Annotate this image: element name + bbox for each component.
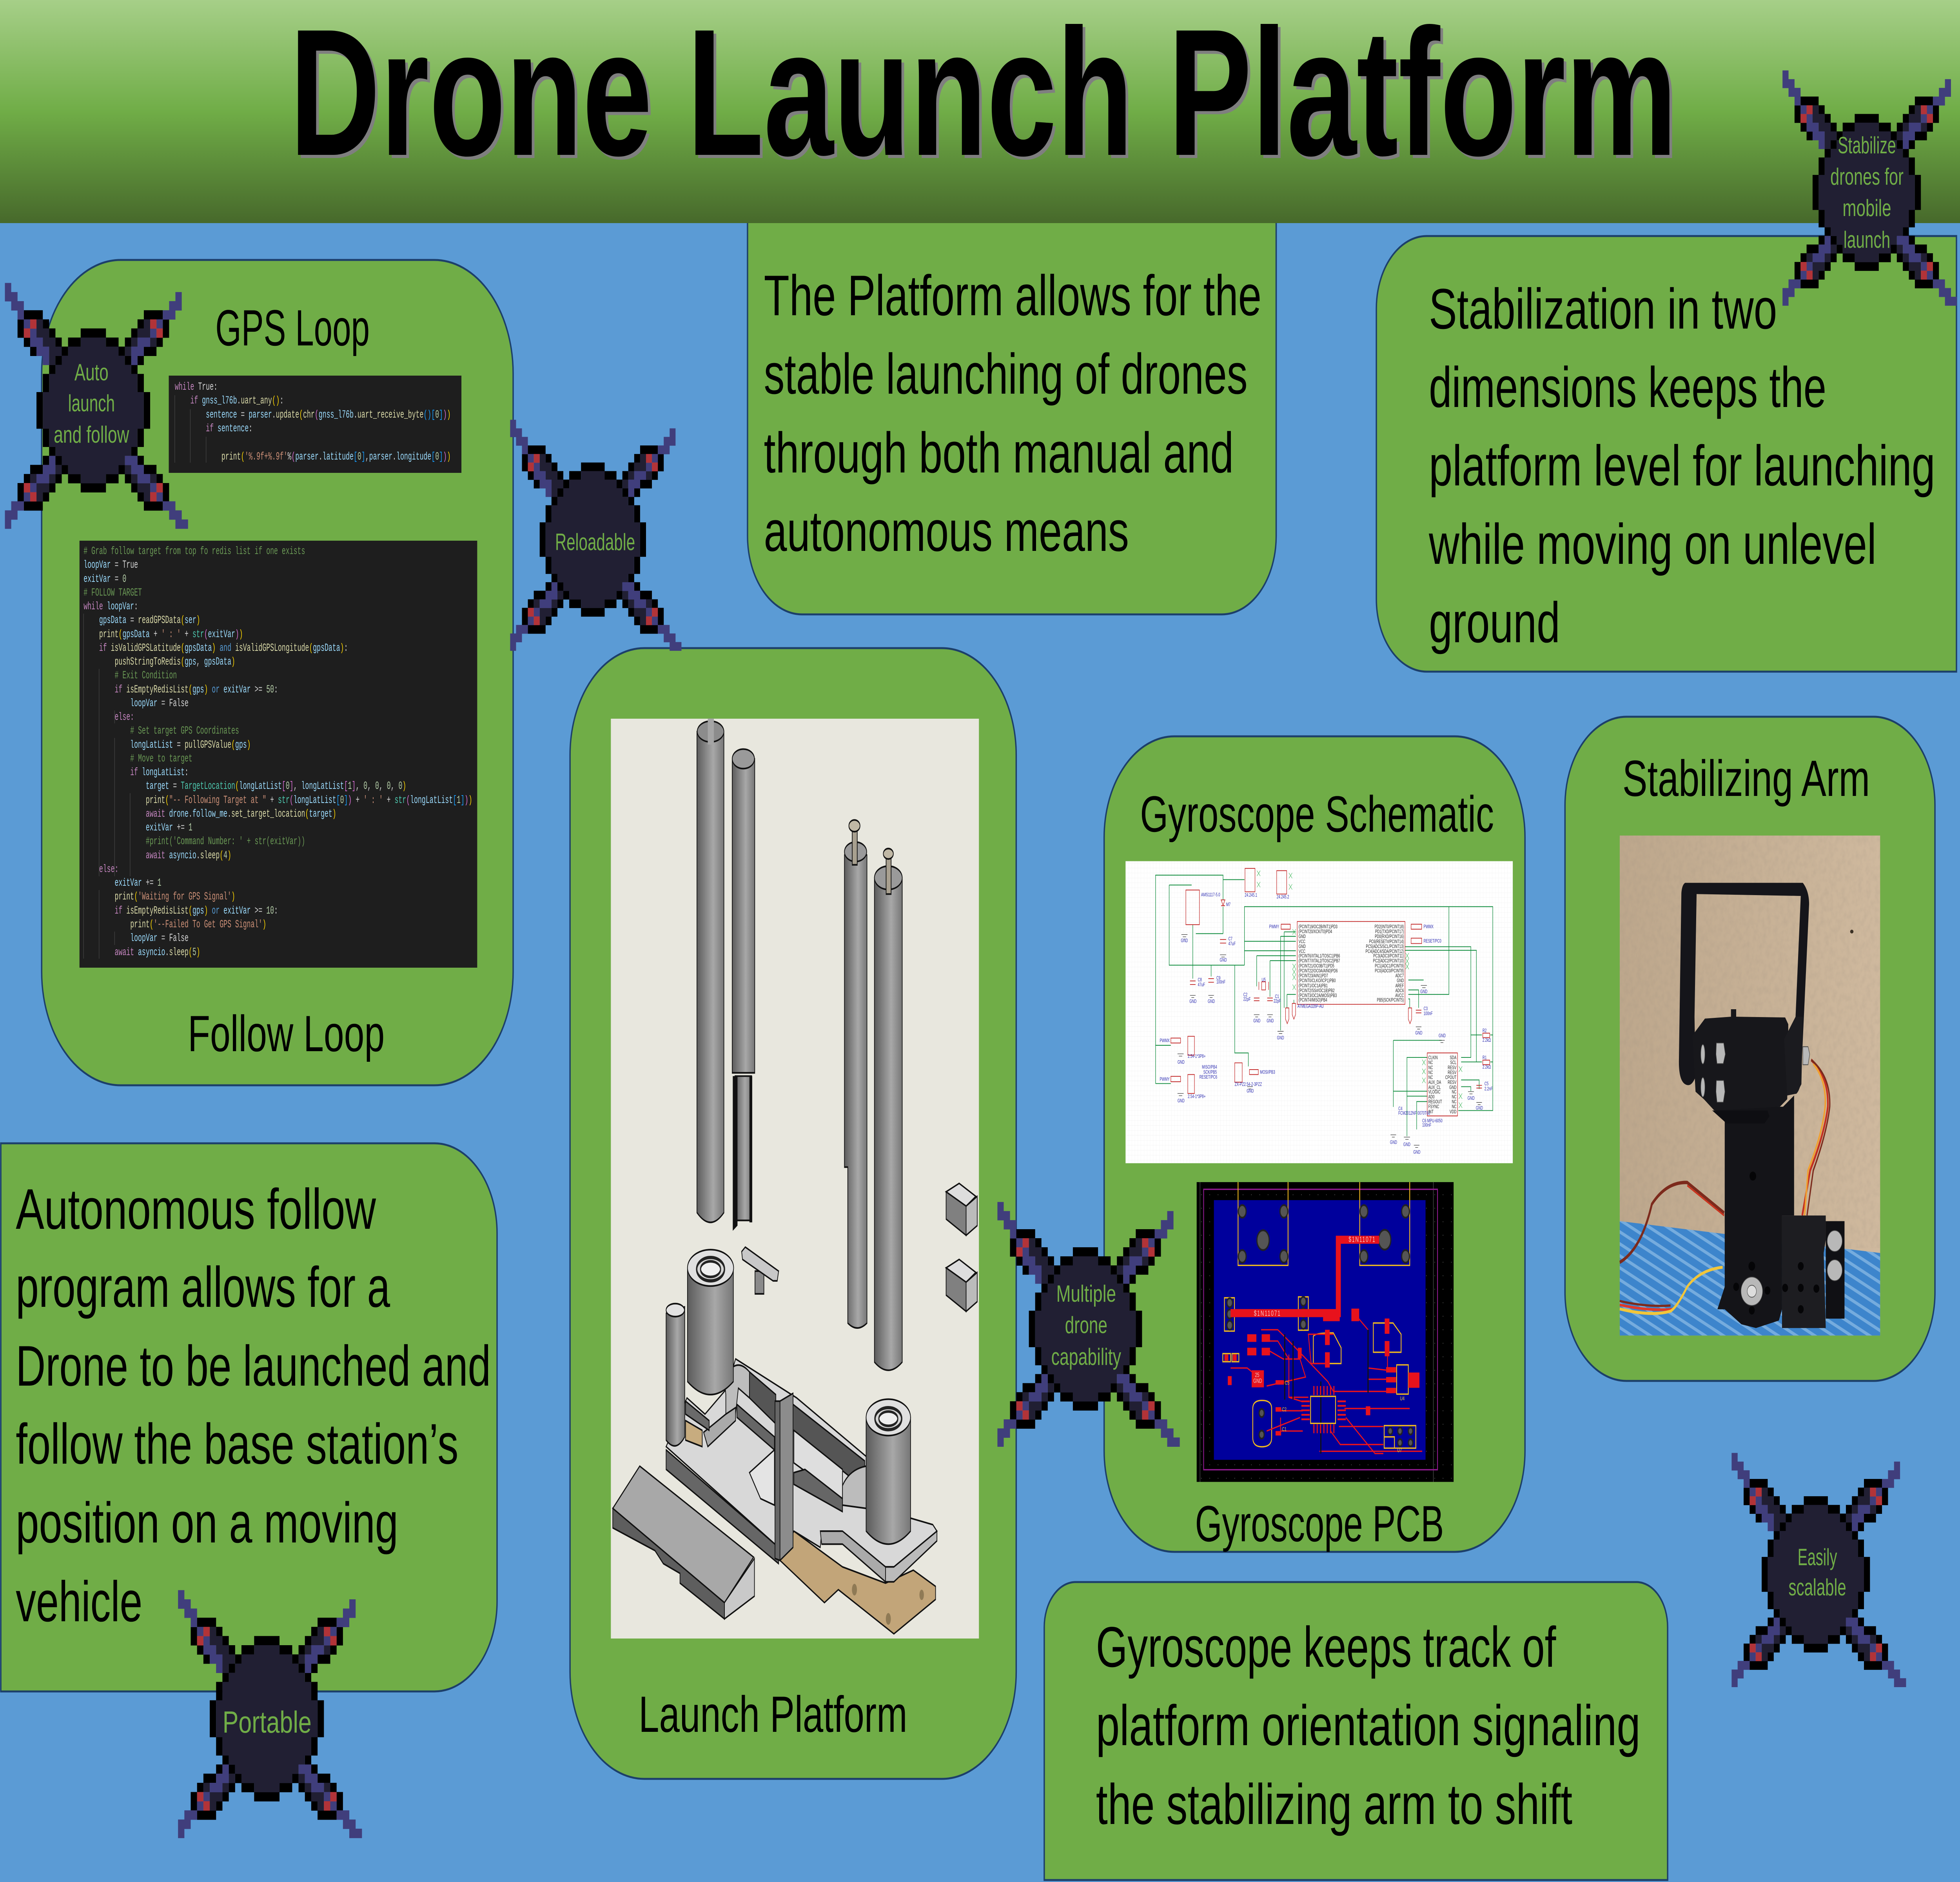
image: gyroscope circuit schematic: C1: [1275, 994, 1279, 999]
code block: follow loop: exitVar = 0: [83, 573, 126, 585]
drone badge: auto launch and follow: [5, 288, 188, 524]
image: gyroscope PCB layout: C1: [1282, 1426, 1287, 1432]
image: gyroscope circuit schematic: (PCINT0/CLKO/ICP1)PB0: [1299, 978, 1336, 984]
image: gyroscope circuit schematic: 24.245.2: [1277, 894, 1289, 900]
panel: gyroscope description: [1044, 1582, 1668, 1880]
image: gyroscope circuit schematic: 47uF: [1229, 941, 1236, 947]
drone badge: stabilize drones for mobile launch: mobile: [1842, 194, 1891, 221]
image: gyroscope circuit schematic: AUX_CL: [1428, 1085, 1441, 1090]
drone badge: multiple drone capability: [997, 1207, 1180, 1442]
image: gyroscope circuit schematic: ATMEGA328P-AU: [1298, 1004, 1324, 1009]
image: gyroscope PCB layout: [1197, 1182, 1454, 1482]
image: gyroscope circuit schematic: VCC: [1299, 949, 1305, 954]
image: gyroscope circuit schematic: GND: [1267, 1018, 1274, 1024]
image: gyroscope circuit schematic: NC: [1452, 1089, 1456, 1095]
image: gyroscope circuit schematic: C4: [1398, 1106, 1403, 1112]
panel: platform summary: The Platform allows for the: [764, 263, 1261, 327]
image: gyroscope circuit schematic: FSYNC: [1428, 1104, 1439, 1110]
image: gyroscope circuit schematic: MOSI/PB3: [1260, 1069, 1275, 1075]
image: gyroscope circuit schematic: 2.2kΩ: [1483, 1065, 1491, 1070]
image: gyroscope PCB layout: GND: [1253, 1377, 1262, 1384]
title banner: [0, 0, 1960, 223]
image: gyroscope circuit schematic: (PCINT2/SS#/OC1B)PB2: [1299, 988, 1335, 994]
image: gyroscope circuit schematic: NC: [1428, 1070, 1433, 1075]
image: gyroscope circuit schematic: AREF: [1396, 983, 1404, 988]
drone badge: multiple drone capability: Multiple: [1056, 1280, 1116, 1307]
image: gyroscope PCB layout: U4: [1400, 1395, 1405, 1402]
code block: follow loop: # Move to target: [130, 752, 192, 765]
panel: autonomous follow description: vehicle: [16, 1570, 142, 1633]
image: gyroscope circuit schematic: (PCINT19/OC2B/INT1)PD3: [1299, 924, 1338, 930]
image: gyroscope circuit schematic: REGOUT: [1428, 1099, 1442, 1105]
image: gyroscope circuit schematic: AUX_DA: [1428, 1080, 1441, 1085]
image: gyroscope circuit schematic: PC1(ADC1/PCINT9): [1375, 963, 1404, 969]
image: gyroscope circuit schematic: [1125, 861, 1513, 1163]
image: gyroscope circuit schematic: C3: [1424, 1006, 1428, 1012]
image: gyroscope PCB layout: 25: [1255, 1372, 1259, 1379]
panel: platform summary: autonomous means: [764, 499, 1129, 563]
panel: platform summary: stable launching of drones: [764, 342, 1248, 406]
panel: launch platform: [570, 648, 1016, 1779]
drone badge: auto launch and follow: Auto: [74, 359, 109, 385]
image: gyroscope circuit schematic: GND: [1253, 1018, 1260, 1024]
drone badge: stabilize drones for mobile launch: launch: [1844, 226, 1890, 253]
image: gyroscope circuit schematic: 22pF: [1243, 996, 1251, 1002]
image: gyroscope circuit schematic: AMS1117-5.0: [1201, 892, 1220, 898]
code block: follow loop: # Exit Condition: [115, 669, 177, 682]
image: gyroscope circuit schematic: (PCINT21/OC0B/T1)PD5: [1299, 963, 1334, 969]
drone badge: reloadable: [510, 424, 681, 647]
panel: autonomous follow description: Autonomous follow: [16, 1177, 376, 1241]
image: gyroscope circuit schematic: C2: [1243, 992, 1247, 997]
image: gyroscope circuit schematic: RESV: [1448, 1080, 1457, 1085]
image: gyroscope PCB layout: C2: [1282, 1406, 1287, 1413]
code block: follow loop: exitVar += 1: [146, 821, 192, 834]
image: gyroscope circuit schematic: C6 MPU-6050: [1422, 1118, 1443, 1124]
heading: GPS Loop: GPS Loop: [215, 300, 370, 356]
panel: stabilization description: platform level for launching: [1429, 434, 1935, 498]
code block: follow loop: # Set target GPS Coordinates: [130, 725, 239, 737]
image: gyroscope circuit schematic: R1: [1483, 1055, 1486, 1061]
code block: follow loop: loopVar = True: [83, 559, 138, 571]
image: gyroscope circuit schematic: (PCINT4/MISO)PB4: [1299, 997, 1327, 1003]
image: gyroscope circuit schematic: PWMX: [1424, 924, 1434, 930]
image: gyroscope PCB layout: C5: [1285, 1379, 1289, 1386]
drone badge: stabilize drones for mobile launch: Stabilize: [1838, 132, 1896, 158]
image: gyroscope PCB layout: U7: [1397, 1447, 1402, 1453]
panel: autonomous follow description: follow the base station’s: [16, 1412, 458, 1476]
panel: gyroscope description: Gyroscope keeps track of: [1096, 1615, 1556, 1679]
image: gyroscope circuit schematic: GND: [1476, 1105, 1483, 1111]
code block: GPS loop: while True:: [175, 381, 218, 393]
image: photo of stabilizing arm: [1620, 836, 1880, 1335]
image: gyroscope circuit schematic: 100nF: [1424, 1011, 1433, 1017]
image: gyroscope circuit schematic: PWMY: [1160, 1077, 1170, 1082]
panel: stabilization description: dimensions keeps the: [1429, 355, 1826, 419]
drone badge: easily scalable: scalable: [1788, 1574, 1846, 1600]
drone badge: stabilize drones for mobile launch: [1782, 75, 1957, 301]
image: gyroscope circuit schematic: GND: [1449, 1085, 1456, 1090]
image: gyroscope circuit schematic: GND: [1439, 1033, 1446, 1039]
drone badge: portable: [178, 1595, 362, 1833]
image: gyroscope circuit schematic: PD2(INT0/PCINT18): [1375, 924, 1404, 930]
image: gyroscope circuit schematic: 100nF: [1422, 1123, 1431, 1128]
image: gyroscope circuit schematic: (PCINT22/OC0A/AIN0)PD6: [1299, 968, 1338, 974]
drone badge: easily scalable: [1731, 1457, 1906, 1683]
image: gyroscope circuit schematic: R2: [1483, 1028, 1486, 1034]
image: gyroscope circuit schematic: GND: [1277, 1035, 1284, 1041]
code block: follow loop: if isValidGPSLatitude(gpsData) and isValidGPSLongitude(gpsData):: [99, 642, 348, 654]
panel: platform summary: through both manual and: [764, 421, 1234, 485]
image: gyroscope circuit schematic: C9: [1216, 976, 1220, 981]
code block: follow loop: await asyncio.sleep(4): [146, 849, 231, 862]
heading: Follow Loop: Follow Loop: [188, 1005, 385, 1062]
code block: GPS loop: sentence = parser.update(chr(gnss_l76b.uart_receive_byte()[0])): [206, 409, 451, 421]
drone badge: portable: Portable: [223, 1705, 312, 1739]
drone badge: reloadable: Reloadable: [555, 529, 635, 555]
code block: follow loop: # FOLLOW TARGET: [83, 587, 142, 599]
image: gyroscope circuit schematic: GND: [1415, 1030, 1423, 1036]
image: gyroscope circuit schematic: ADC7: [1396, 973, 1404, 979]
image: gyroscope circuit schematic: (PCINT7/XTAL2/TOSC2)PB7: [1299, 958, 1340, 964]
image: gyroscope circuit schematic: GND: [1390, 1140, 1397, 1145]
image: gyroscope circuit schematic: 2.54-1*3P8+: [1188, 1054, 1206, 1059]
panel: stabilization description: ground: [1429, 590, 1560, 654]
image: gyroscope circuit schematic: VLOGIC: [1428, 1089, 1441, 1095]
image: gyroscope circuit schematic: GND: [1299, 944, 1306, 950]
panel: gyroscope description: platform orientation signaling: [1096, 1693, 1641, 1757]
image: gyroscope circuit schematic: MISO/PB4: [1202, 1065, 1217, 1070]
code block: follow loop: print('Waiting for GPS Signal'): [115, 890, 235, 903]
panel: stabilization description: Stabilization in two: [1429, 277, 1777, 341]
heading: Gyroscope PCB: Gyroscope PCB: [1195, 1495, 1444, 1552]
image: gyroscope circuit schematic: 47uF: [1198, 982, 1205, 988]
code block: follow loop: else:: [99, 863, 118, 876]
image: gyroscope circuit schematic: 24.245.1: [1245, 892, 1257, 898]
image: gyroscope circuit schematic: PC2(ADC2/PCINT10): [1373, 958, 1404, 964]
image: gyroscope circuit schematic: GND: [1189, 999, 1196, 1005]
image: gyroscope circuit schematic: FCM2012NF 0070T68: [1398, 1110, 1430, 1116]
image: gyroscope circuit schematic: PB5(SCK/PCINT5): [1377, 997, 1404, 1003]
image: gyroscope PCB layout: $1N11071: [1254, 1309, 1280, 1318]
image: gyroscope circuit schematic: PC3(ADC3/PCINT11): [1373, 953, 1404, 959]
drone badge: auto launch and follow: and follow: [54, 421, 129, 448]
panel: stabilizing arm: [1565, 717, 1935, 1381]
image: gyroscope circuit schematic: NC: [1428, 1065, 1433, 1070]
panel: gyroscope schematic and PCB: [1104, 736, 1525, 1552]
image: gyroscope circuit schematic: (PCINT3/OC2A/MOSI)PB3: [1299, 993, 1337, 999]
code block: follow loop: if isEmptyRedisList(gps) or exitVar >= 50:: [115, 683, 278, 696]
panel: gyroscope description: the stabilizing arm to shift: [1096, 1772, 1572, 1836]
drone badge: auto launch and follow: launch: [68, 390, 115, 416]
image: gyroscope circuit schematic: GND: [1208, 999, 1215, 1005]
image: gyroscope PCB layout: $1N11071: [1348, 1235, 1375, 1244]
image: gyroscope circuit schematic: NC: [1452, 1099, 1456, 1105]
image: gyroscope circuit schematic: NC: [1452, 1104, 1456, 1110]
image: gyroscope circuit schematic: 2.2nF: [1485, 1086, 1493, 1092]
image: gyroscope circuit schematic: VDD: [1450, 1109, 1456, 1115]
image: gyroscope circuit schematic: GND: [1299, 934, 1306, 939]
image: gyroscope circuit schematic: 22pF: [1274, 998, 1281, 1004]
image: gyroscope circuit schematic: NC: [1428, 1060, 1433, 1066]
code block: follow loop: loopVar = False: [130, 697, 189, 710]
image: gyroscope circuit schematic: PWMX: [1160, 1038, 1170, 1044]
code block: follow loop: loopVar = False: [130, 932, 189, 945]
code block: follow loop: # Grab follow target from top fo redis list if one exists: [83, 545, 305, 558]
heading: Launch Platform: Launch Platform: [639, 1686, 907, 1743]
code block: GPS loop: if gnss_l76b.uart_any():: [190, 394, 283, 407]
image: gyroscope circuit schematic: ADC6: [1396, 988, 1404, 994]
image: gyroscope circuit schematic: GND: [1397, 978, 1404, 984]
image: gyroscope circuit schematic: PWMY: [1269, 924, 1279, 930]
image: gyroscope circuit schematic: GND: [1247, 1088, 1254, 1094]
image: gyroscope circuit schematic: SCK/PB5: [1203, 1069, 1217, 1075]
image: gyroscope circuit schematic: CPOUT: [1445, 1075, 1456, 1081]
image: gyroscope circuit schematic: C7: [1229, 936, 1232, 942]
image: gyroscope circuit schematic: NC: [1428, 1075, 1433, 1081]
image: gyroscope circuit schematic: RESV: [1448, 1065, 1457, 1070]
image: gyroscope circuit schematic: (PCINT1/OC1A)PB1: [1299, 983, 1328, 988]
image: gyroscope circuit schematic: AVCC: [1395, 993, 1404, 999]
image: gyroscope circuit schematic: GND: [1468, 1095, 1475, 1101]
panel: stabilization description: while moving on unlevel: [1428, 512, 1877, 576]
code block: follow loop: await drone.follow_me.set_target_location(target): [146, 808, 336, 820]
image: gyroscope circuit schematic: RESET/PC6: [1200, 1074, 1217, 1080]
drone badge: multiple drone capability: drone: [1065, 1312, 1107, 1338]
image: gyroscope circuit schematic: GND: [1420, 989, 1427, 994]
code block: follow loop: if isEmptyRedisList(gps) or exitVar >= 10:: [115, 905, 278, 917]
image: gyroscope circuit schematic: (PCINT6/XTAL1/TOSC1)PB6: [1299, 953, 1340, 959]
image: gyroscope circuit schematic: GND: [1178, 1059, 1185, 1065]
image: gyroscope circuit schematic: C5: [1485, 1081, 1488, 1087]
image: gyroscope circuit schematic: 2.54-1*3P8+: [1188, 1094, 1206, 1099]
image: gyroscope circuit schematic: RESV: [1448, 1070, 1457, 1075]
image: gyroscope circuit schematic: (PCINT20/XCK/T0)PD4: [1299, 929, 1332, 935]
image: gyroscope circuit schematic: GND: [1220, 957, 1227, 963]
image: gyroscope circuit schematic: SCL: [1450, 1060, 1456, 1066]
image: gyroscope circuit schematic: PC5(ADC5/SCL/PCINT13): [1366, 944, 1404, 950]
image: gyroscope circuit schematic: CLKIN: [1428, 1055, 1438, 1061]
code block: follow loop: gpsData = readGPSData(ser): [99, 614, 200, 627]
code block: follow loop: pushStringToRedis(gps, gpsData): [115, 656, 235, 668]
code block: GPS loop: if sentence:: [206, 422, 252, 435]
image: gyroscope circuit schematic: PD1(TXD/PCINT17): [1375, 929, 1404, 935]
code block: follow loop: print('--Failed To Get GPS Signal'): [130, 918, 266, 931]
panel: autonomous follow description: position on a moving: [16, 1491, 398, 1555]
drone badge: stabilize drones for mobile launch: drones for: [1830, 163, 1904, 190]
image: gyroscope circuit schematic: INT: [1428, 1109, 1434, 1115]
panel: autonomous follow description: [1, 1143, 497, 1691]
panel: autonomous follow description: program allows for a: [16, 1255, 390, 1319]
image: gyroscope circuit schematic: C8: [1198, 977, 1202, 983]
code block: follow loop: print(gpsData + ' : ' + str(exitVar)): [99, 628, 243, 641]
image: gyroscope circuit schematic: (PCINT23/AIN1)PD7: [1299, 973, 1328, 979]
panel: autonomous follow description: Drone to be launched and: [16, 1334, 491, 1398]
panel: GPS loop and follow loop: [42, 260, 513, 1085]
heading: Gyroscope Schematic: Gyroscope Schematic: [1140, 786, 1494, 843]
image: gyroscope circuit schematic: AD0: [1428, 1094, 1435, 1100]
code block: follow loop: #print('Command Number: ' + str(exitVar)): [146, 835, 305, 848]
code block: follow loop: await asyncio.sleep(5): [115, 946, 200, 959]
code block: follow loop: target = TargetLocation(longLatList[0], longLatList[1], 0, 0, 0, 0): [146, 780, 406, 792]
image: gyroscope circuit schematic: U5: [1262, 977, 1266, 983]
code block: follow loop: exitVar += 1: [115, 877, 162, 889]
drone badge: multiple drone capability: capability: [1051, 1343, 1121, 1370]
heading: Stabilizing Arm: Stabilizing Arm: [1622, 750, 1870, 807]
image: gyroscope circuit schematic: 2.2kΩ: [1483, 1037, 1491, 1043]
image: gyroscope circuit schematic: RESET/PC0: [1424, 938, 1441, 944]
image: gyroscope circuit schematic: PD0(RXD/PCINT16): [1375, 934, 1404, 939]
code block: follow loop: else:: [115, 711, 134, 723]
image: gyroscope circuit schematic: NC: [1452, 1094, 1456, 1100]
code block: follow loop: while loopVar:: [83, 600, 138, 613]
code block: GPS loop: print('%.9f+%.9f'%(parser.latitude[0],parser.longitude[0])): [221, 451, 451, 463]
image: gyroscope circuit schematic: M7: [1226, 902, 1230, 908]
image: gyroscope circuit schematic: GND: [1178, 1098, 1185, 1104]
code block: follow loop: print("-- Following Target at " + str(longLatList[0]) + ' : ' + str(longLatList[1])): [146, 794, 472, 807]
image: gyroscope circuit schematic: GND: [1403, 1142, 1410, 1148]
image: gyroscope circuit schematic: PC4(ADC4/SDA/PCINT12): [1366, 949, 1404, 954]
image: gyroscope circuit schematic: SDA: [1450, 1055, 1457, 1061]
code block: follow loop: if longLatList:: [130, 766, 189, 779]
image: gyroscope circuit schematic: 100nF: [1216, 979, 1225, 985]
code block: follow loop: [80, 541, 477, 968]
panel: stabilization description: [1376, 236, 1956, 672]
code block: GPS loop: [169, 376, 461, 473]
drone badge: easily scalable: Easily: [1798, 1544, 1837, 1570]
image: exploded CAD drawing of the platform: [611, 719, 979, 1639]
image: gyroscope circuit schematic: GND: [1181, 938, 1188, 944]
image: gyroscope circuit schematic: PC6(RESET#/PCINT14): [1369, 939, 1404, 945]
image: gyroscope circuit schematic: ZX-PZ2.54-2-3PZZ: [1235, 1081, 1262, 1087]
image: gyroscope circuit schematic: VCC: [1299, 939, 1305, 945]
panel: platform summary: [748, 118, 1276, 614]
image: gyroscope circuit schematic: PC0(ADC0/PCINT8): [1375, 968, 1404, 974]
image: gyroscope circuit schematic: GND: [1413, 1150, 1421, 1155]
code block: follow loop: longLatList = pullGPSValue(gps): [130, 739, 251, 751]
